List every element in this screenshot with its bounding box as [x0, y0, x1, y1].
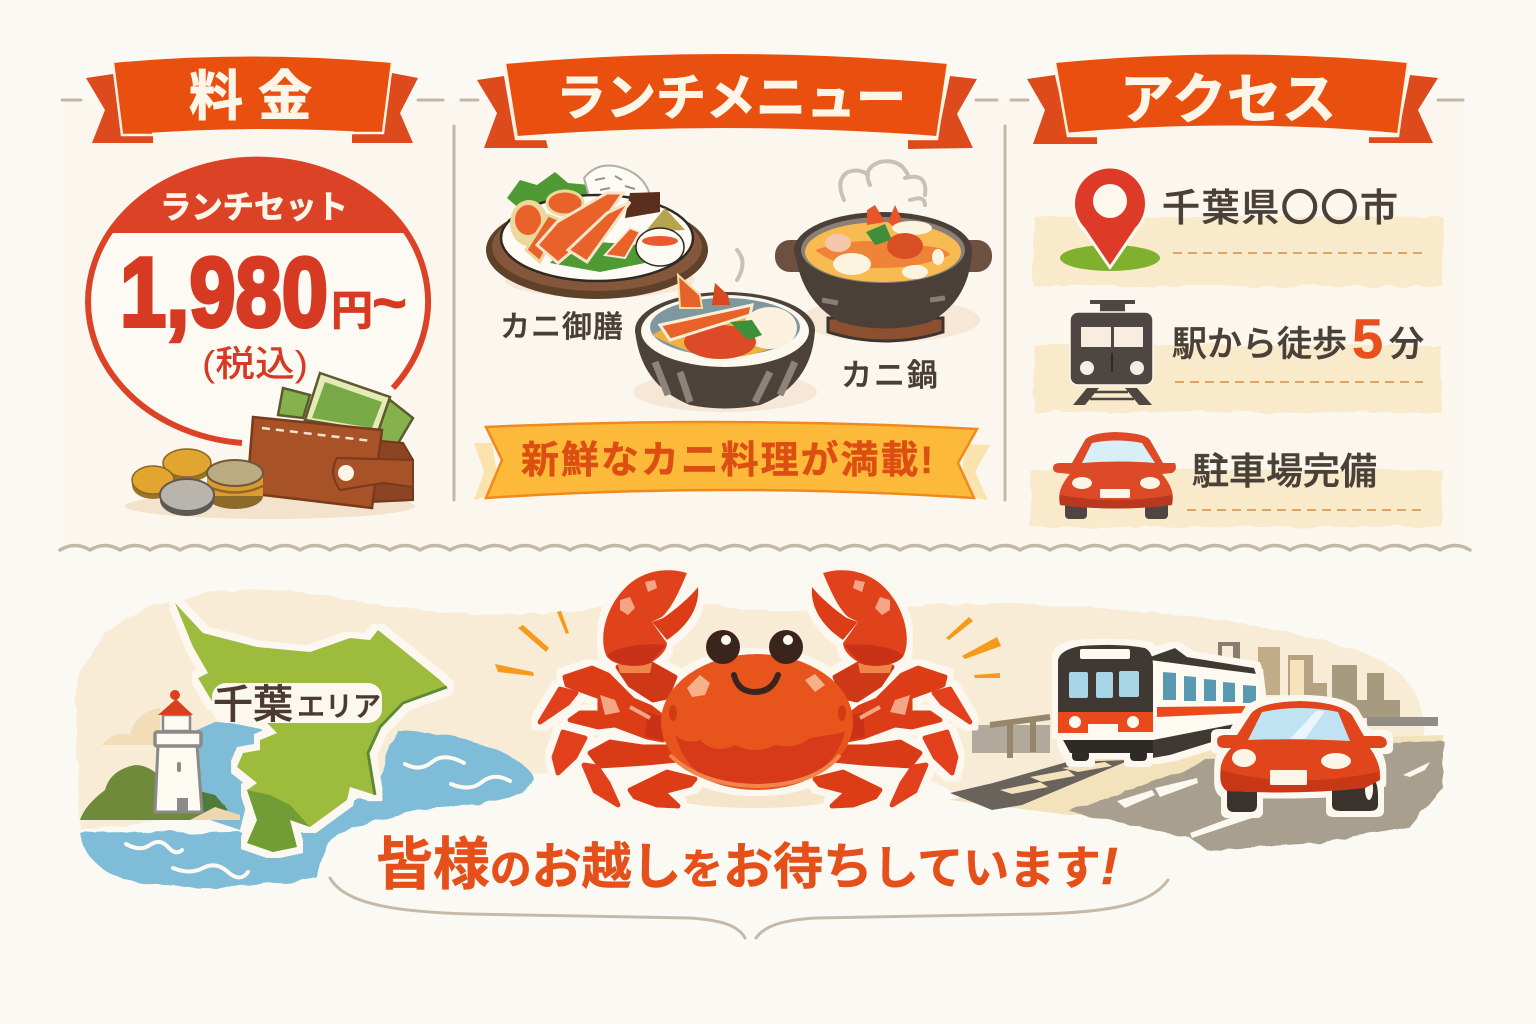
body markings — [669, 674, 846, 787]
icon: wallet and coins — [125, 373, 415, 519]
heading ribbon: price — [86, 56, 418, 143]
road shoulder — [950, 735, 1443, 815]
label: lunch set: ランチセット — [160, 189, 348, 225]
waves — [126, 757, 510, 878]
welcome message: 皆様のお越しをお待ちしています! — [376, 833, 1118, 897]
railway track — [950, 760, 1130, 810]
label: crab set meal: カニ御膳 — [500, 311, 623, 344]
panel: lunch menu — [474, 54, 992, 500]
heading ribbon: access: アクセス — [1120, 70, 1336, 130]
walking distance text: 駅から徒歩 — [1172, 325, 1347, 364]
parking band — [1030, 470, 1442, 527]
crab body — [661, 654, 853, 790]
address text: 千葉県〇〇市 — [1162, 188, 1398, 230]
road — [1070, 740, 1443, 850]
scene: Chiba map — [80, 603, 534, 887]
price amount: 1,980 — [120, 237, 328, 347]
top information panel — [60, 100, 1465, 548]
scene: tan landscape backdrop — [75, 591, 1424, 830]
price unit: ~ — [372, 269, 407, 336]
icon: crab set meal plate — [486, 166, 708, 299]
icon: crab hot pot — [775, 161, 992, 342]
area label: 千葉 — [213, 683, 293, 727]
icon: excitement rays — [495, 611, 1001, 678]
panel frame: dashes and dividers — [60, 100, 1470, 550]
label: crab hot pot: カニ鍋 — [841, 358, 938, 393]
foreground car — [1217, 701, 1387, 812]
icon: train — [1070, 300, 1153, 405]
city skyline — [1218, 642, 1438, 726]
panel: price — [86, 56, 428, 519]
Chiba peninsula — [175, 603, 447, 852]
icon: map pin — [1060, 169, 1160, 271]
walking distance text: 5 — [1352, 307, 1383, 370]
parking text: 駐車場完備 — [1192, 451, 1377, 492]
walking distance text: 分 — [1389, 325, 1424, 364]
panel: access — [1027, 54, 1443, 527]
crab legs and claws — [540, 570, 970, 806]
eyes — [706, 630, 803, 664]
viaduct — [972, 717, 1050, 758]
icon: crab rice bowl — [633, 250, 817, 412]
brace under message — [330, 878, 1168, 938]
smile — [734, 675, 778, 692]
heading ribbon: lunch menu — [477, 54, 977, 149]
yellow slogan ribbon — [474, 422, 990, 500]
crab shadow — [670, 784, 840, 808]
area label — [212, 683, 382, 727]
yellow slogan ribbon: 新鮮なカニ料理が満載! — [521, 440, 933, 482]
price circle — [87, 160, 428, 444]
price unit: 円 — [331, 287, 373, 334]
scene: train and car — [950, 642, 1443, 850]
crab mascot — [540, 570, 970, 808]
address band — [1034, 217, 1443, 286]
heading ribbon: lunch menu: ランチメニュー — [556, 70, 906, 126]
icon: lighthouse — [80, 690, 240, 820]
icon: car — [1053, 432, 1176, 519]
train — [1058, 645, 1260, 761]
heading ribbon: price: 料金 — [189, 67, 327, 127]
area label: エリア — [297, 691, 381, 722]
walking band — [1034, 345, 1441, 412]
heading ribbon: access — [1027, 54, 1438, 144]
tax note: (税込) — [202, 343, 308, 384]
sea — [80, 722, 534, 887]
